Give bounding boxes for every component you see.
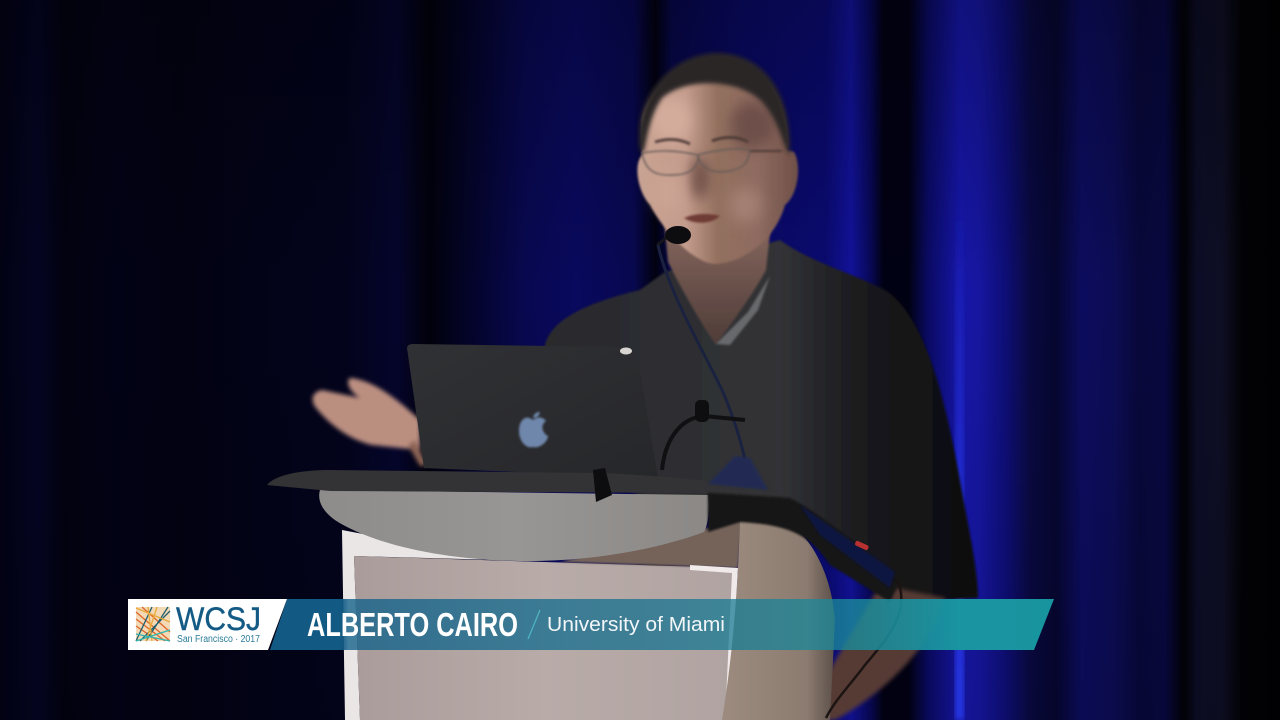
gesturing hand: [313, 378, 427, 466]
apple logo: [519, 412, 548, 447]
glasses: [642, 149, 782, 175]
laptop: [407, 344, 658, 478]
mic base: [708, 456, 768, 490]
lectern white frame: [342, 530, 500, 720]
lectern top edge: [267, 470, 795, 510]
lectern grey bumper: [319, 490, 709, 561]
wire below arm: [826, 580, 901, 718]
clamp: [593, 468, 612, 502]
laptop corner light: [620, 348, 632, 354]
speaker torso and black shirt: [540, 240, 978, 602]
divider slash: [528, 610, 540, 639]
eyebrows, nose and mouth: [655, 137, 748, 223]
lectern: [267, 456, 901, 720]
lectern inner panel: [354, 556, 736, 720]
affiliation: University of Miami: [547, 614, 725, 636]
logo plate: [128, 599, 287, 650]
lectern shelf shadow: [560, 520, 742, 568]
forearm below banner: [800, 585, 945, 720]
hair: [639, 53, 790, 155]
neck: [664, 215, 772, 345]
headset microphone: [657, 226, 691, 245]
red light: [854, 540, 869, 551]
lapel clip and cable: [662, 400, 745, 470]
logo mark: radiating lines: [136, 607, 170, 641]
face light and shadow: [652, 98, 774, 223]
speaker name: ALBERTO CAIRO: [307, 606, 518, 643]
head: [637, 62, 798, 264]
dark lectern lip and cable: [708, 493, 898, 602]
lower-third banner: [128, 599, 1054, 650]
lectern right side: [722, 520, 835, 720]
speaker: [313, 53, 978, 720]
lectern panel edge light: [690, 565, 738, 720]
open shirt collar: [716, 276, 770, 345]
logo location line: San Francisco · 2017: [177, 634, 260, 645]
microphone cable: [658, 245, 746, 465]
blue cable band: [800, 505, 895, 588]
banner band: [270, 599, 1054, 650]
logo wordmark: WCSJ: [176, 601, 261, 637]
